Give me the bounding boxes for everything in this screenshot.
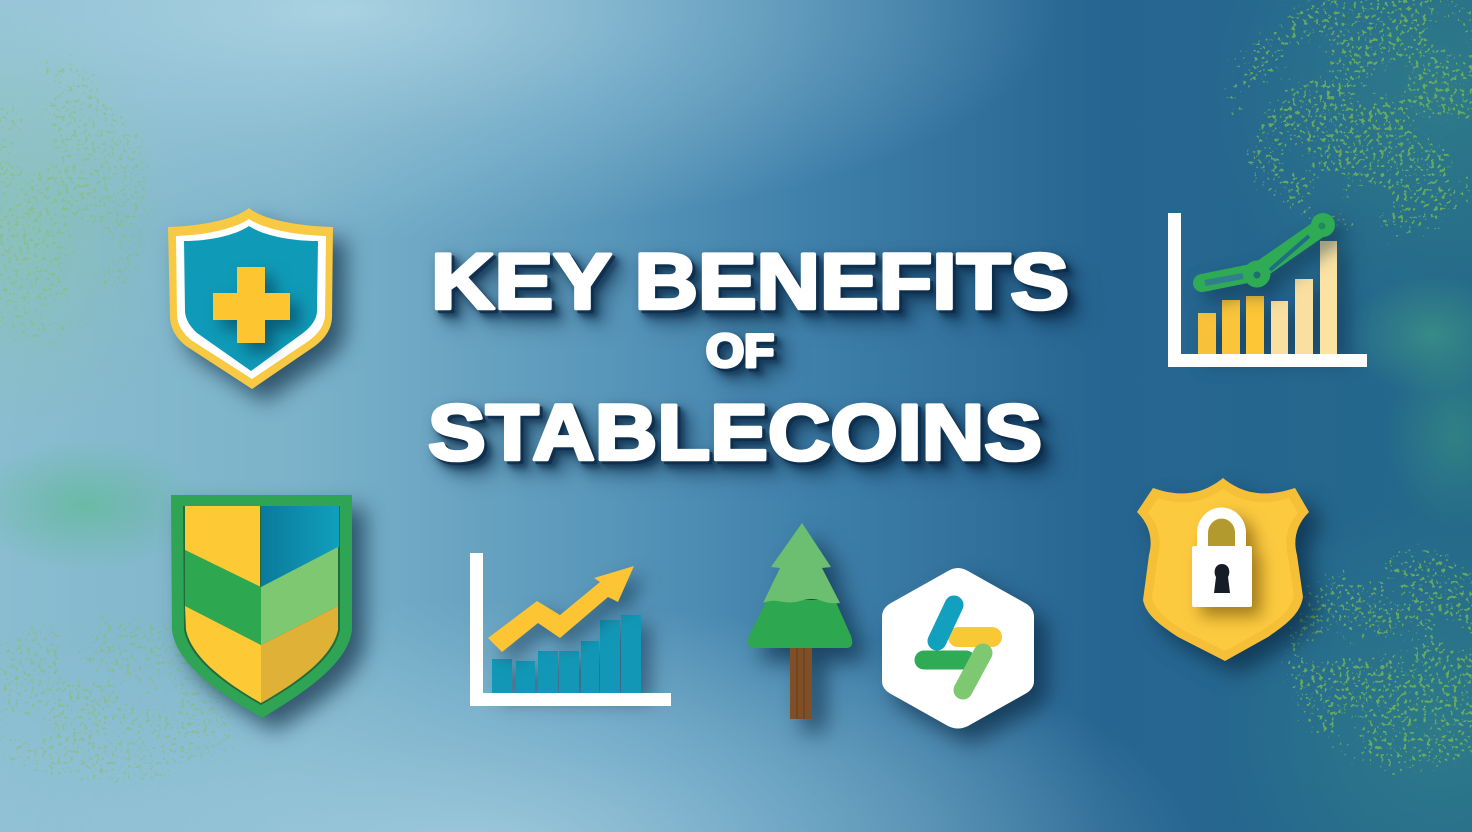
icon: rising arrow chart bbox=[470, 553, 671, 706]
bars bbox=[492, 615, 641, 693]
green link line bbox=[1202, 213, 1335, 288]
chart axes bbox=[470, 553, 671, 706]
title line 2: OF bbox=[706, 324, 774, 376]
blue stroke bbox=[937, 605, 954, 641]
title line 3: STABLECOINS bbox=[428, 388, 1042, 476]
yellow arrow bbox=[488, 566, 634, 652]
icon: tree bbox=[748, 523, 852, 719]
title bbox=[428, 236, 1069, 476]
icon: medical shield bbox=[168, 208, 333, 389]
icon: growth chart with green link bbox=[1168, 213, 1367, 367]
chart axes bbox=[1168, 213, 1367, 367]
green stroke bbox=[924, 650, 966, 670]
title line 1: KEY BENEFITS bbox=[431, 236, 1069, 326]
keyhole bbox=[1214, 564, 1230, 593]
icon: padlock shield bbox=[1137, 478, 1309, 661]
bars bbox=[1198, 241, 1337, 354]
icon: chevron shield bbox=[171, 495, 352, 718]
icon: yellow cross bbox=[213, 267, 290, 343]
padlock bbox=[1192, 513, 1252, 607]
icon: hexagon badge bbox=[882, 568, 1034, 728]
yellow stroke bbox=[958, 627, 992, 647]
light green stroke bbox=[963, 653, 983, 690]
